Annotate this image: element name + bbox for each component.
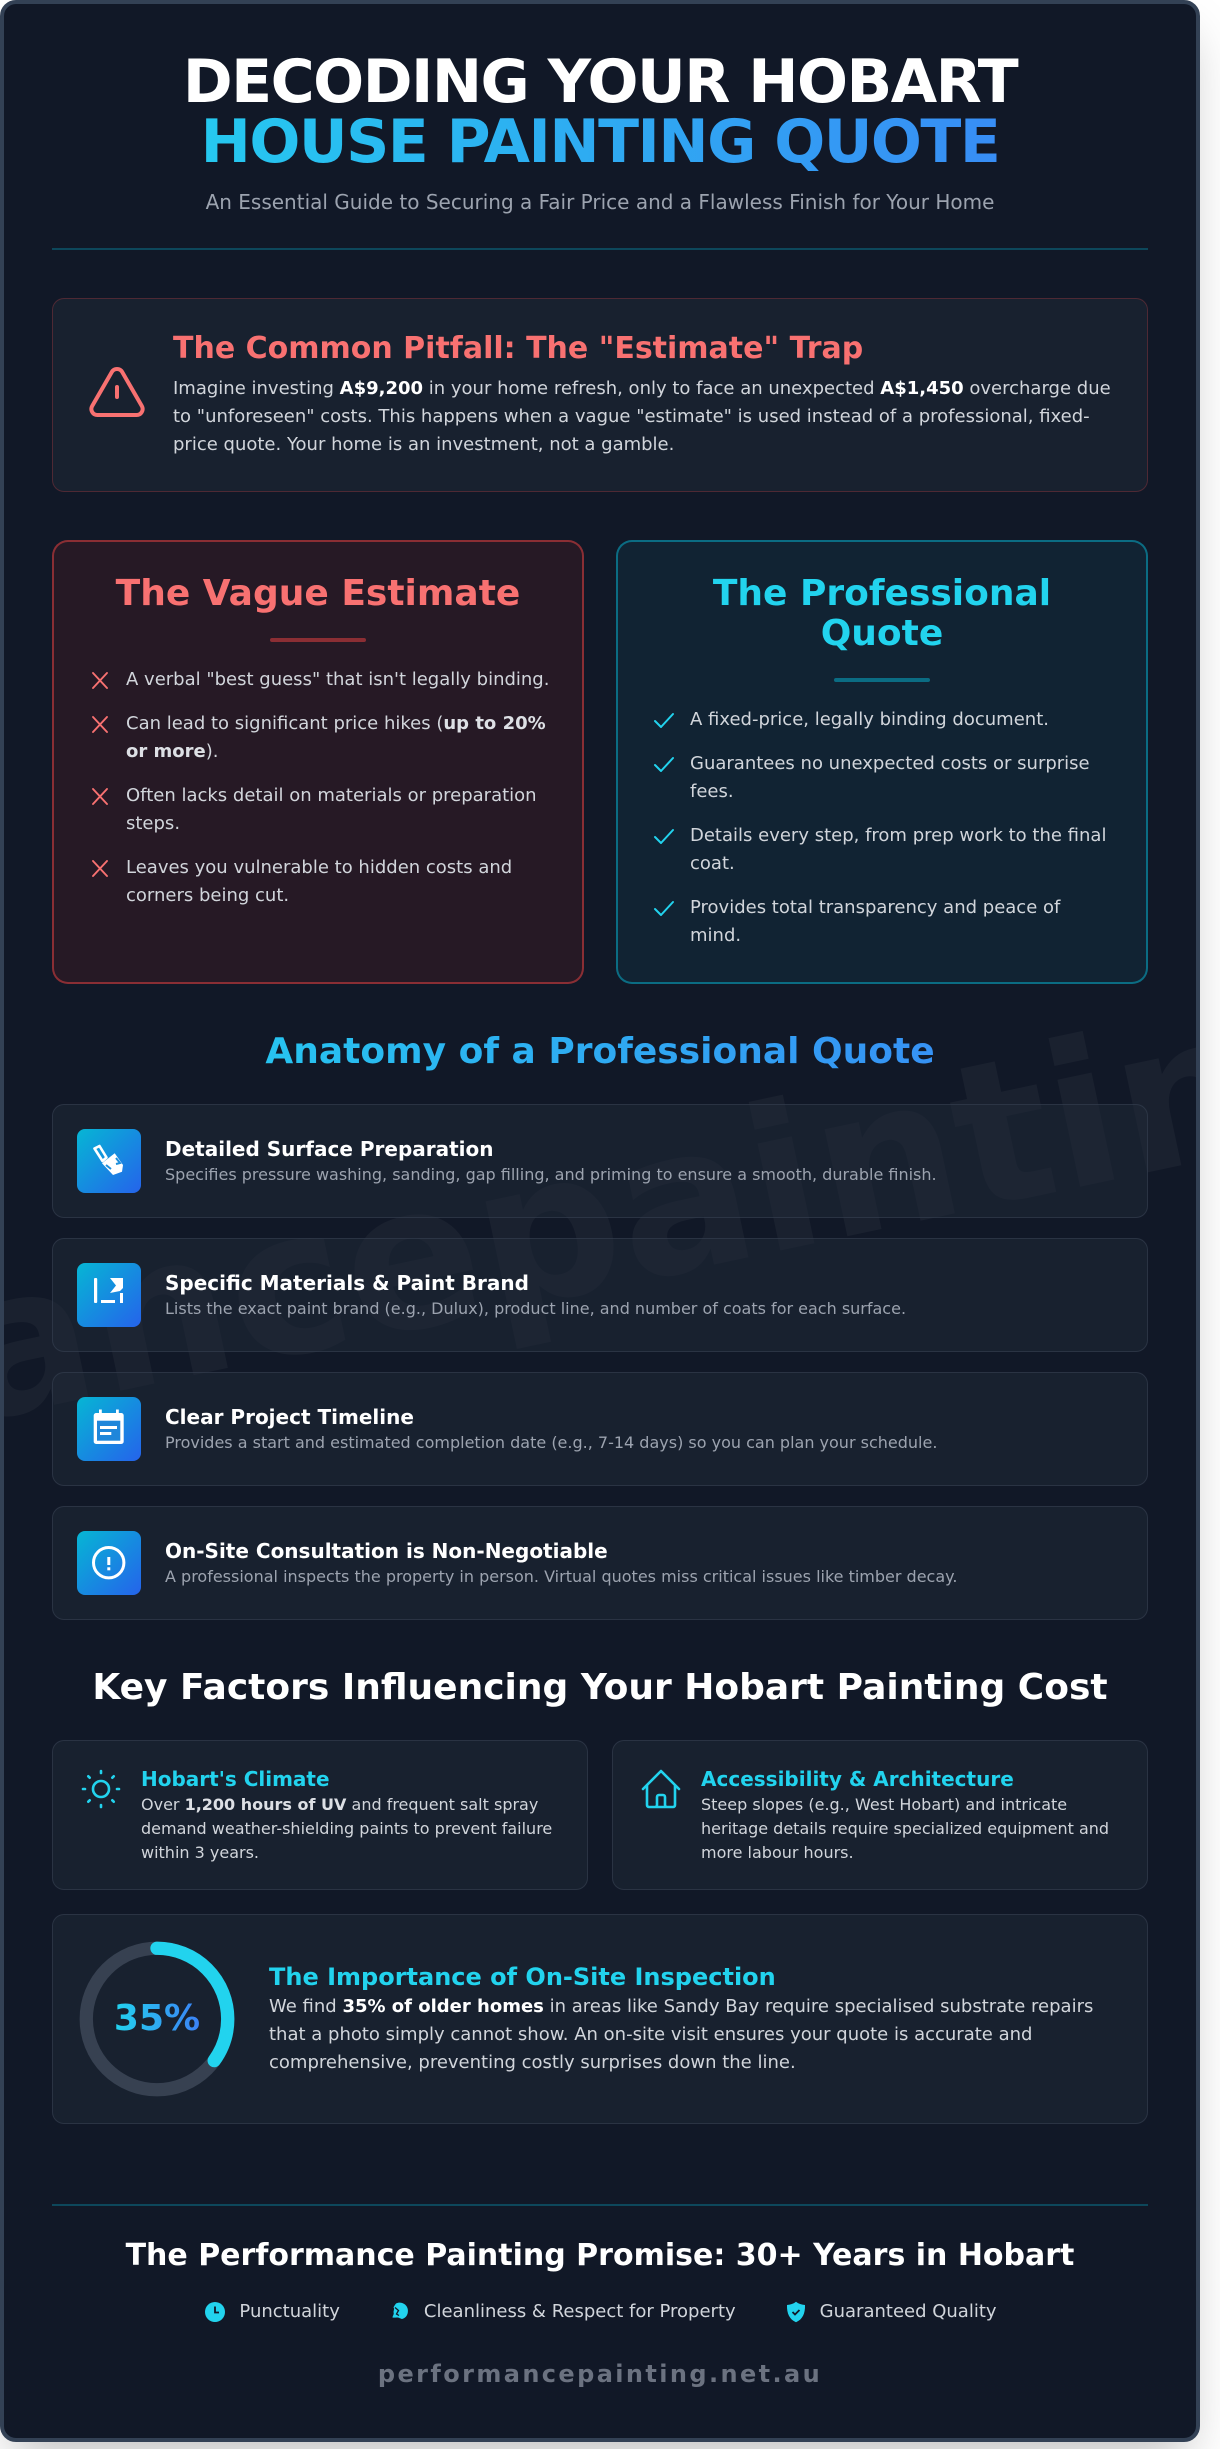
- card text: Specifies pressure washing, sanding, gap filling, and priming to ensure a smooth, durable finish.: [165, 1165, 937, 1184]
- climate text: Over 1,200 hours of UV and frequent salt spray demand weather-shielding paints to prevent failure within 3 years.: [141, 1795, 552, 1862]
- footer: [52, 2204, 1148, 2390]
- icon: calendar: [77, 1397, 141, 1461]
- card text: Lists the exact paint brand (e.g., Dulux), product line, and number of coats for each surface.: [165, 1299, 906, 1318]
- card text: [165, 1137, 937, 1184]
- title: HOUSE PAINTING QUOTE: [201, 107, 999, 177]
- panel: estimate trap callout: [52, 298, 1148, 492]
- card text: A professional inspects the property in person. Virtual quotes miss critical issues like timber decay.: [165, 1567, 957, 1586]
- heading: anatomy of a professional quote: Anatomy of a Professional Quote: [265, 1031, 935, 1072]
- card text: Specific Materials & Paint Brand: [165, 1271, 529, 1295]
- list: estimate drawbacks: A verbal "best guess" that isn't legally binding.: [126, 669, 549, 690]
- card text: On-Site Consultation is Non-Negotiable: [165, 1539, 608, 1563]
- title: DECODING YOUR HOBART: [183, 47, 1017, 117]
- heading: vague estimate: The Vague Estimate: [116, 573, 520, 614]
- list: estimate drawbacks: Leaves you vulnerable to hidden costs and corners being cut.: [126, 857, 512, 906]
- icon: scraper: [77, 1129, 141, 1193]
- panel: accessibility and architecture: [612, 1740, 1148, 1890]
- card text: Provides a start and estimated completion date (e.g., 7-14 days) so you can plan your schedule.: [165, 1433, 937, 1452]
- panel: the vague estimate: [52, 540, 584, 984]
- card text: Detailed Surface Preparation: [165, 1137, 494, 1161]
- list: quote benefits: [654, 709, 1106, 946]
- chart: 35% donut: 35%: [114, 1998, 200, 2039]
- list: quote benefits: Provides total transparency and peace of mind.: [690, 897, 1060, 946]
- callout body: Imagine investing A$9,200 in your home refresh, only to face an unexpected A$1,450 overcharge due to "unforeseen" costs. This happens when a vague "estimate" is used instead of a professional, fixed-price quote. Your home is an investment, not a gamble.: [173, 378, 1111, 455]
- header: [52, 52, 1148, 250]
- climate text: Hobart's Climate: [141, 1767, 330, 1791]
- icon: house: [642, 1770, 680, 1808]
- list: quote benefits: Guarantees no unexpected costs or surprise fees.: [690, 753, 1090, 802]
- factor panels: [52, 1740, 1148, 1890]
- callout heading: The Common Pitfall: The "Estimate" Trap: [173, 331, 863, 366]
- website: performancepainting.net.au: [378, 2360, 822, 2388]
- card text: [165, 1405, 937, 1452]
- card: project timeline: [52, 1372, 1148, 1486]
- card: on-site consultation: [52, 1506, 1148, 1620]
- list: estimate drawbacks: Can lead to significant price hikes (up to 20% or more).: [126, 713, 546, 762]
- comparison panels: [52, 540, 1148, 984]
- list: quote benefits: A fixed-price, legally binding document.: [690, 709, 1049, 730]
- heading: key factors: Key Factors Influencing Your Hobart Painting Cost: [92, 1667, 1108, 1708]
- item: cleanliness: Cleanliness & Respect for Property: [424, 2301, 736, 2322]
- panel: on-site inspection stat: [52, 1914, 1148, 2124]
- footer heading: The Performance Painting Promise: 30+ Years in Hobart: [126, 2238, 1074, 2273]
- list: estimate drawbacks: [92, 669, 549, 906]
- chart: 35% donut: [80, 1942, 234, 2096]
- card text: Clear Project Timeline: [165, 1405, 414, 1429]
- card text: [165, 1539, 957, 1586]
- item: guaranteed quality: Guaranteed Quality: [820, 2301, 997, 2322]
- promise items: [205, 2301, 997, 2322]
- panel: hobart's climate: [52, 1740, 588, 1890]
- icon: exclamation circle: [77, 1531, 141, 1595]
- heading: professional quote: The Professional Quote: [713, 573, 1051, 654]
- item: punctuality: Punctuality: [239, 2301, 340, 2322]
- subtitle: An Essential Guide to Securing a Fair Price and a Flawless Finish for Your Home: [206, 190, 994, 214]
- inspection text: We find 35% of older homes in areas like Sandy Bay require specialised substrate repairs that a photo simply cannot show. An on-site visit ensures your quote is accurate and comprehensive, preventing costly surprises down the line.: [269, 1996, 1093, 2073]
- callout text: [173, 331, 1111, 455]
- icon: paint tin: [77, 1263, 141, 1327]
- anatomy cards: [52, 1104, 1148, 1620]
- card: surface preparation: [52, 1104, 1148, 1218]
- list: estimate drawbacks: Often lacks detail on materials or preparation steps.: [126, 785, 537, 834]
- accessibility text: Accessibility & Architecture: [701, 1767, 1014, 1791]
- accessibility text: Steep slopes (e.g., West Hobart) and intricate heritage details require specialized equipment and more labour hours.: [701, 1795, 1109, 1862]
- title: [183, 47, 1018, 177]
- panel: the professional quote: [616, 540, 1148, 984]
- card text: [165, 1271, 906, 1318]
- heading: anatomy of a professional quote: [52, 1032, 1148, 1072]
- list: quote benefits: Details every step, from prep work to the final coat.: [690, 825, 1106, 874]
- inspection text: The Importance of On-Site Inspection: [269, 1963, 776, 1991]
- icon: warning triangle: [89, 367, 145, 417]
- card: materials and paint brand: [52, 1238, 1148, 1352]
- icon: sun: [82, 1770, 120, 1808]
